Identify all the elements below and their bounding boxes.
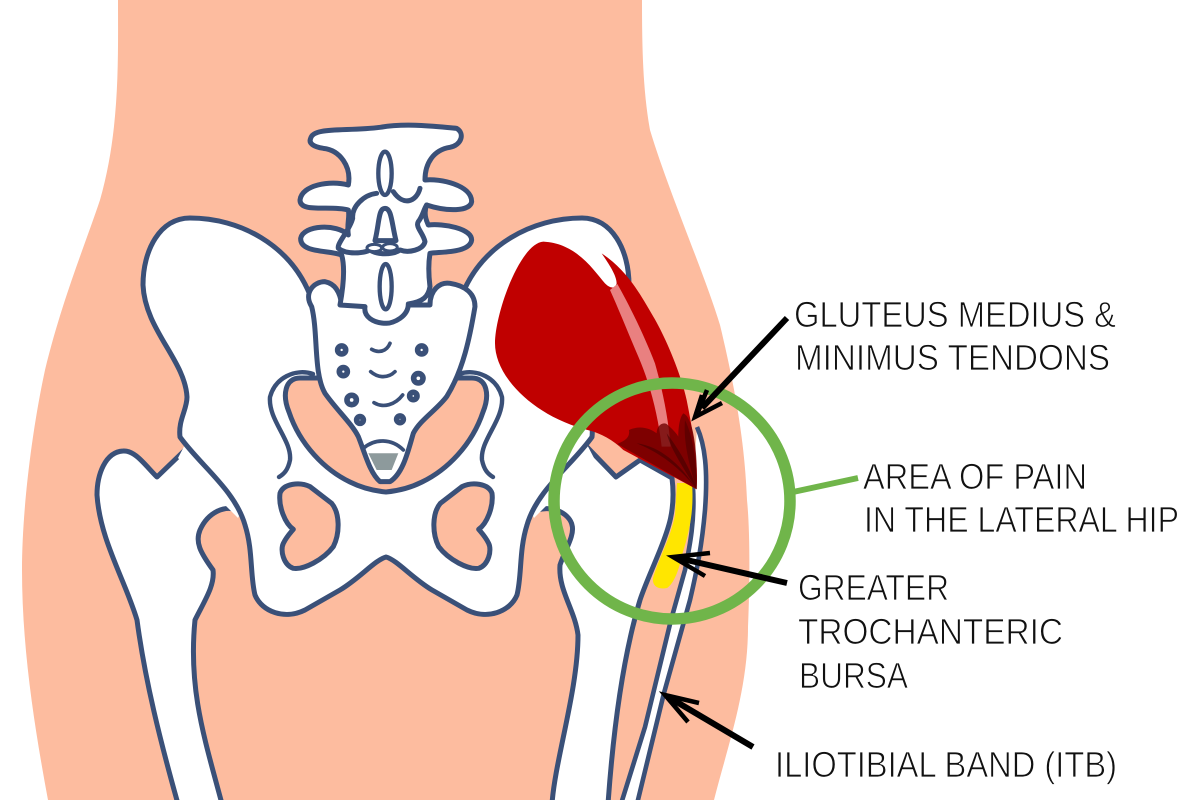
label: area of pain: AREA OF PAIN [863,456,1087,497]
pain area connector [793,478,858,492]
tendon highlight [610,284,671,447]
label: area of pain [863,456,1179,540]
label: gluteus tendons: MINIMUS TENDONS [795,337,1110,378]
pain area circle [554,383,790,619]
vertebral details [338,188,427,254]
right obturator foramen [434,484,492,569]
sacrum and lumbar vertebrae [300,125,475,482]
skeleton [97,125,673,800]
body silhouette [22,0,749,800]
trochanteric bursa [653,483,693,589]
gluteus muscle [495,242,697,489]
dark tendon fan [617,413,697,489]
label: bursa [798,567,1063,696]
label: bursa: BURSA [799,655,908,696]
coccyx [368,453,398,470]
sacral ridges [363,343,403,450]
label: bursa: TROCHANTERIC [798,611,1063,652]
label: bursa: GREATER [798,567,949,608]
pelvis [143,218,629,614]
right sacroiliac line [459,372,502,477]
spinous processes [378,152,392,195]
right femur [537,447,673,800]
left sacroiliac line [270,372,313,477]
label: iliotibial band: ILIOTIBIAL BAND (ITB) [775,744,1117,785]
femoral neck fill [178,435,594,518]
sacral foramina [338,346,426,423]
left obturator foramen [280,484,338,569]
pelvic inlet [285,378,487,492]
sacrum [309,282,475,482]
iliotibial band [621,427,706,800]
label: gluteus tendons [794,294,1116,378]
label: gluteus tendons: GLUTEUS MEDIUS & [794,294,1116,335]
left femur [97,450,237,800]
arrow: bursa [673,553,787,583]
muscle belly [495,242,697,489]
arrow: iliotibial band [665,695,753,747]
arrow: gluteus tendons [695,318,787,417]
vertebrae outline [300,125,472,323]
